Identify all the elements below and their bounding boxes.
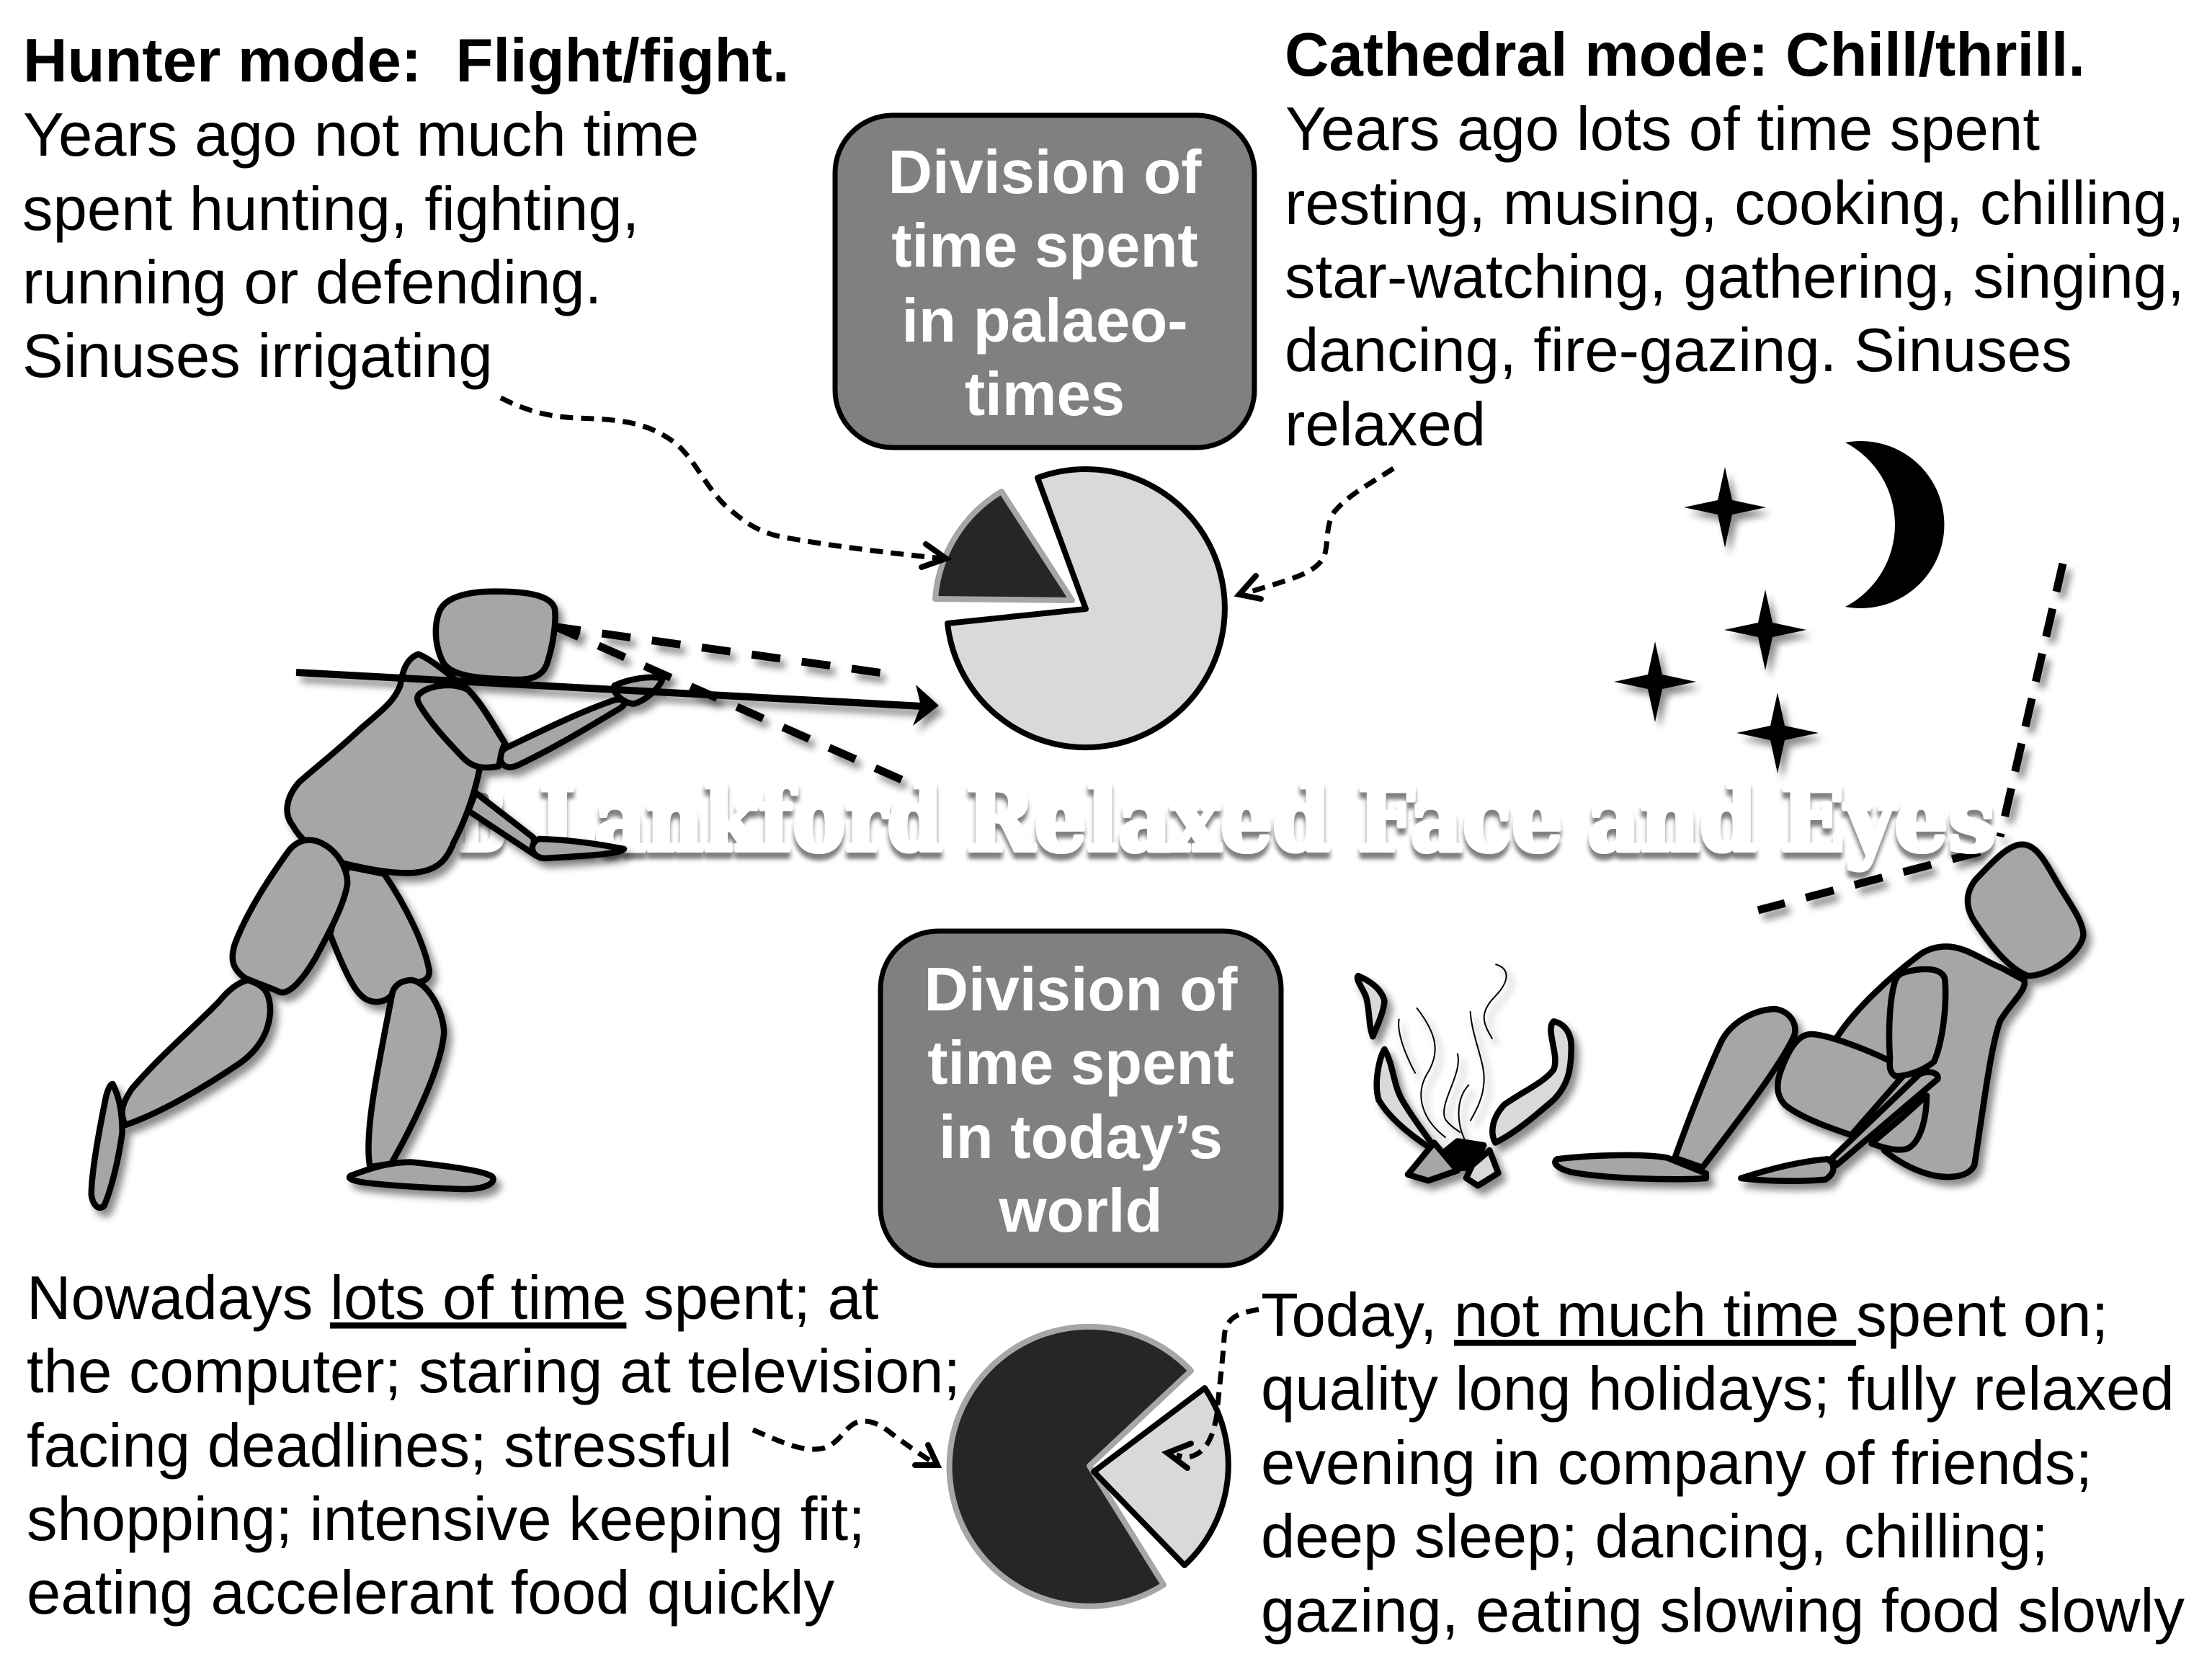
heading: hunter mode: Hunter mode: Flight/fight. <box>23 27 790 95</box>
panel: division of time in today's world <box>880 931 1281 1266</box>
shin <box>1674 1009 1795 1167</box>
panel: division of time in today's world: time spent <box>927 1029 1234 1098</box>
heading: cathedral mode: Cathedral mode: Chill/thrill. <box>1285 21 2085 89</box>
text block: cathedral mode description: star-watching, gathering, singing, <box>1285 243 2185 311</box>
trailing foot <box>92 1084 122 1208</box>
text block: cathedral mode description: resting, musing, cooking, chilling, <box>1285 169 2185 238</box>
arrow: cathedral text to pie <box>1239 468 1393 599</box>
spear arrow <box>296 672 939 726</box>
text block: cathedral mode description <box>1285 95 2185 459</box>
watermark: Eyes <box>1780 767 1996 872</box>
head <box>1968 845 2083 976</box>
text block: today: quality long holidays; fully relaxed <box>1261 1355 2175 1423</box>
text block: nowadays <box>27 1264 960 1627</box>
panel: division of time in palaeo-times: times <box>965 360 1125 429</box>
heading and text: hunter mode <box>22 27 790 391</box>
pie chart: palaeo-times <box>935 469 1225 747</box>
gripping hand <box>614 677 663 704</box>
panel: division of time in palaeo-times: time spent <box>891 212 1198 280</box>
embers <box>1440 1142 1484 1168</box>
icon: campfire <box>1357 964 1571 1186</box>
head <box>436 592 556 680</box>
watermark <box>458 767 1996 872</box>
pie slice: cathedral mode share <box>1094 1388 1228 1565</box>
rear thigh <box>1871 1095 1927 1149</box>
pie slice: hunter mode share <box>950 1327 1191 1606</box>
left log <box>1408 1143 1458 1180</box>
rear arm <box>468 793 537 856</box>
panel: division of time in today's world: in today’s <box>939 1103 1223 1172</box>
text block: today: Today, not much time spent on; <box>1261 1281 2108 1350</box>
heading and text: cathedral mode <box>1285 21 2185 459</box>
pie slice: cathedral mode share <box>947 469 1225 747</box>
panel: division of time in palaeo-times <box>835 115 1254 448</box>
panel: division of time in today's world: Division of <box>924 956 1238 1024</box>
arrow: hunter text to pie <box>501 398 946 567</box>
panel: division of time in palaeo-times: in palaeo- <box>901 287 1188 355</box>
text block: cathedral mode description: dancing, fire-gazing. Sinuses <box>1285 316 2072 385</box>
text block: hunter mode description: Years ago not much time <box>23 101 699 169</box>
pie chart: today's world <box>950 1327 1228 1606</box>
watermark: Relaxed <box>966 767 1330 872</box>
torso <box>287 654 505 873</box>
rear shin <box>368 980 444 1167</box>
front thigh <box>233 840 347 992</box>
sight lines: relaxed gaze <box>1758 564 2063 910</box>
arrow: today text to pie <box>1167 1309 1259 1468</box>
sight lines: hunter focus <box>556 627 905 781</box>
arrow: nowadays text to pie <box>753 1421 937 1465</box>
watermark: and <box>1587 767 1757 872</box>
forearm <box>500 700 625 768</box>
trailing calf <box>122 980 270 1125</box>
figure: reclining person <box>1555 845 2083 1181</box>
upper arm <box>1889 969 1945 1076</box>
hand <box>1741 1159 1834 1181</box>
front foot <box>349 1162 494 1189</box>
text block: today: gazing, eating slowing food slowly <box>1261 1577 2185 1645</box>
watermark: Lankford <box>539 767 942 872</box>
text block: cathedral mode description: relaxed <box>1285 391 1486 459</box>
panel: division of time in today's world: world <box>999 1177 1162 1245</box>
left flame <box>1377 1049 1438 1153</box>
upper arm <box>417 685 505 768</box>
foot <box>1555 1155 1706 1179</box>
text block: cathedral mode description: Years ago lots of time spent <box>1285 95 2040 164</box>
text block: nowadays: the computer; staring at television; <box>27 1338 960 1406</box>
panel: division of time in palaeo-times: Division of <box>888 138 1202 207</box>
text block: today: deep sleep; dancing, chilling; <box>1261 1503 2048 1571</box>
torso <box>1837 946 2025 1177</box>
text block: nowadays: Nowadays lots of time spent; at <box>27 1264 879 1333</box>
text block: today <box>1261 1281 2185 1645</box>
thigh <box>1778 1034 1903 1135</box>
lower hand <box>532 839 624 858</box>
smoke <box>1399 964 1507 1140</box>
text block: hunter mode description: running or defending. <box>22 249 602 317</box>
small flame <box>1357 976 1385 1036</box>
text block: today: evening in company of friends; <box>1261 1429 2092 1498</box>
text block: hunter mode description: Sinuses irrigating <box>22 322 493 391</box>
pie slice: hunter mode share <box>935 492 1072 600</box>
watermark: B <box>458 767 507 872</box>
text block: nowadays: eating accelerant food quickly <box>27 1559 835 1627</box>
watermark: Face <box>1357 767 1563 872</box>
icon: moon <box>1845 441 1944 608</box>
text block: nowadays: facing deadlines; stressful <box>27 1412 732 1480</box>
rear leg <box>330 866 429 1002</box>
forearm <box>1831 1072 1938 1165</box>
right log <box>1466 1150 1498 1186</box>
right flame <box>1492 1021 1571 1143</box>
figure: hunter with spear <box>92 592 939 1208</box>
text block: hunter mode description <box>22 101 699 391</box>
text block: hunter mode description: spent hunting, fighting, <box>22 175 639 244</box>
text block: nowadays: shopping; intensive keeping fit; <box>27 1485 865 1554</box>
icon: stars <box>1614 467 1819 773</box>
